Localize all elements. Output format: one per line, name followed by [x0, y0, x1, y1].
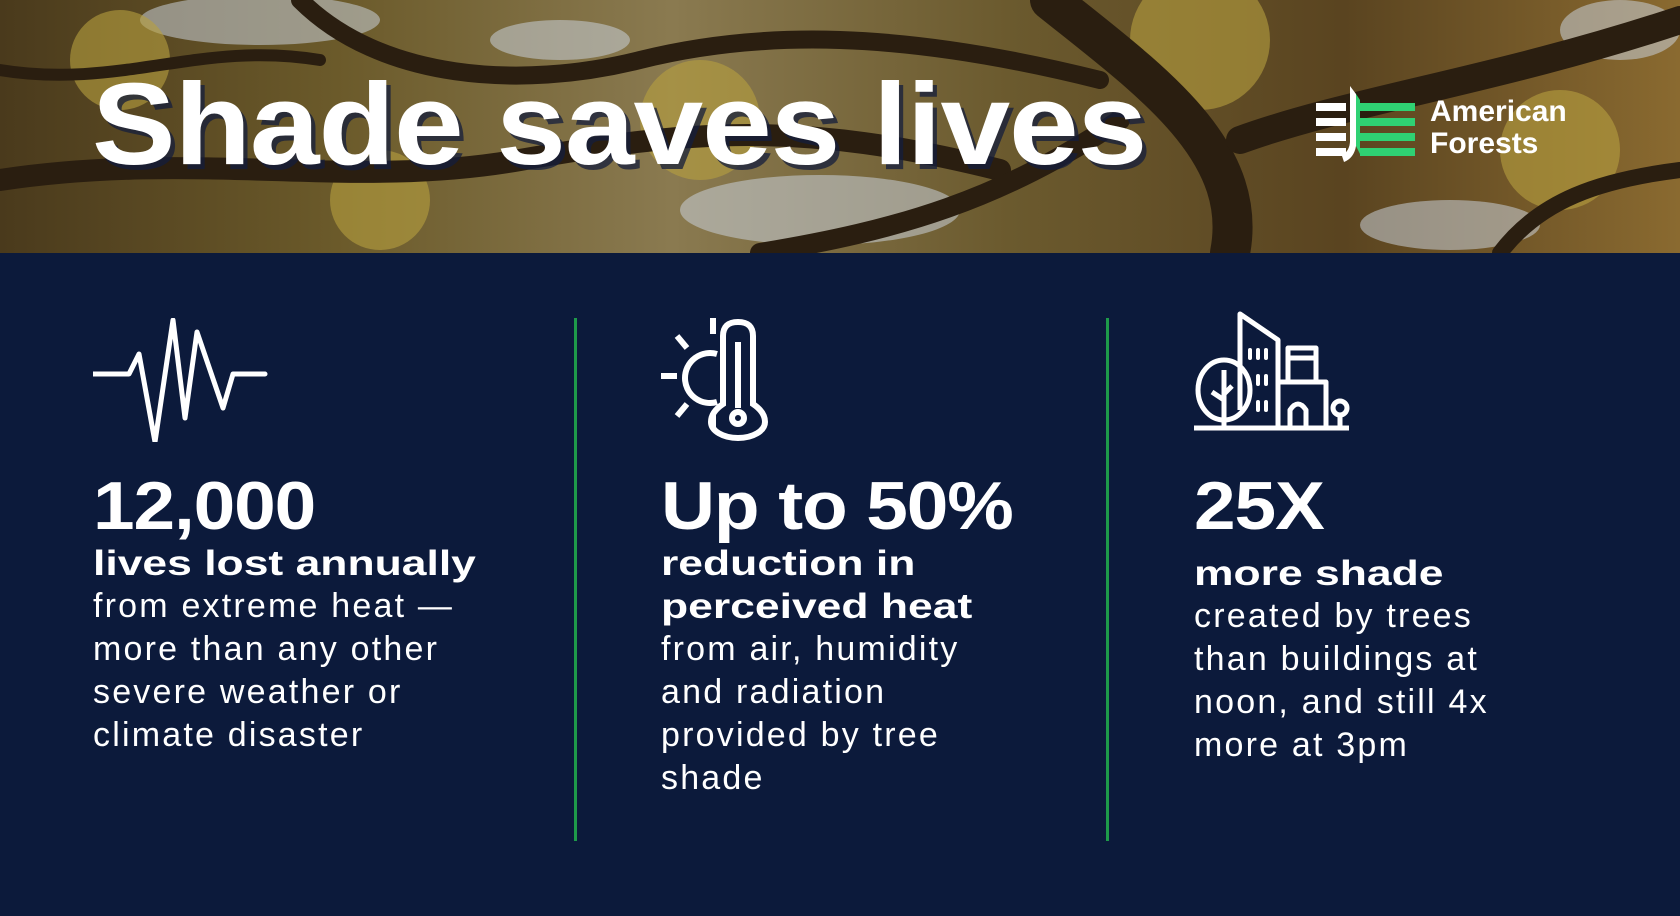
- text block: than buildings at: [1194, 640, 1479, 678]
- title: Shade saves lives: [92, 59, 1146, 189]
- icon: heartbeat: [93, 318, 268, 442]
- text block: from extreme heat —: [93, 587, 454, 625]
- text block: [1194, 554, 1489, 764]
- stat: 25X: 25X: [1194, 468, 1324, 544]
- panel: more shade: [1194, 312, 1489, 764]
- text block: reduction in: [661, 544, 915, 583]
- text block: more shade: [1194, 554, 1444, 593]
- text block: more at 3pm: [1194, 726, 1409, 764]
- text block: shade: [661, 759, 765, 797]
- icon: city and tree: [1194, 312, 1350, 430]
- text block: more than any other: [93, 630, 439, 668]
- panel: lives lost: [93, 318, 476, 754]
- stat: 12,000: 12,000: [93, 468, 315, 544]
- text block: from air, humidity: [661, 630, 959, 668]
- panel: perceived heat: [661, 318, 1013, 797]
- text block: and radiation: [661, 673, 886, 711]
- text block: severe weather or: [93, 673, 403, 711]
- logo: American Forests: American: [1430, 95, 1567, 128]
- text block: climate disaster: [93, 716, 364, 754]
- text block: noon, and still 4x: [1194, 683, 1489, 721]
- divider: [574, 318, 577, 841]
- text block: perceived heat: [661, 587, 972, 626]
- text block: created by trees: [1194, 597, 1473, 635]
- text block: lives lost annually: [93, 544, 476, 583]
- stat: up to 50%: Up to 50%: [661, 468, 1013, 544]
- text block: provided by tree: [661, 716, 940, 754]
- text block: [661, 544, 972, 797]
- icon: sun thermometer: [661, 318, 768, 441]
- photo banner: [0, 0, 1680, 253]
- divider: [1106, 318, 1109, 841]
- logo: American Forests: Forests: [1430, 127, 1538, 160]
- logo: American Forests: [1316, 86, 1567, 162]
- text block: [93, 544, 476, 754]
